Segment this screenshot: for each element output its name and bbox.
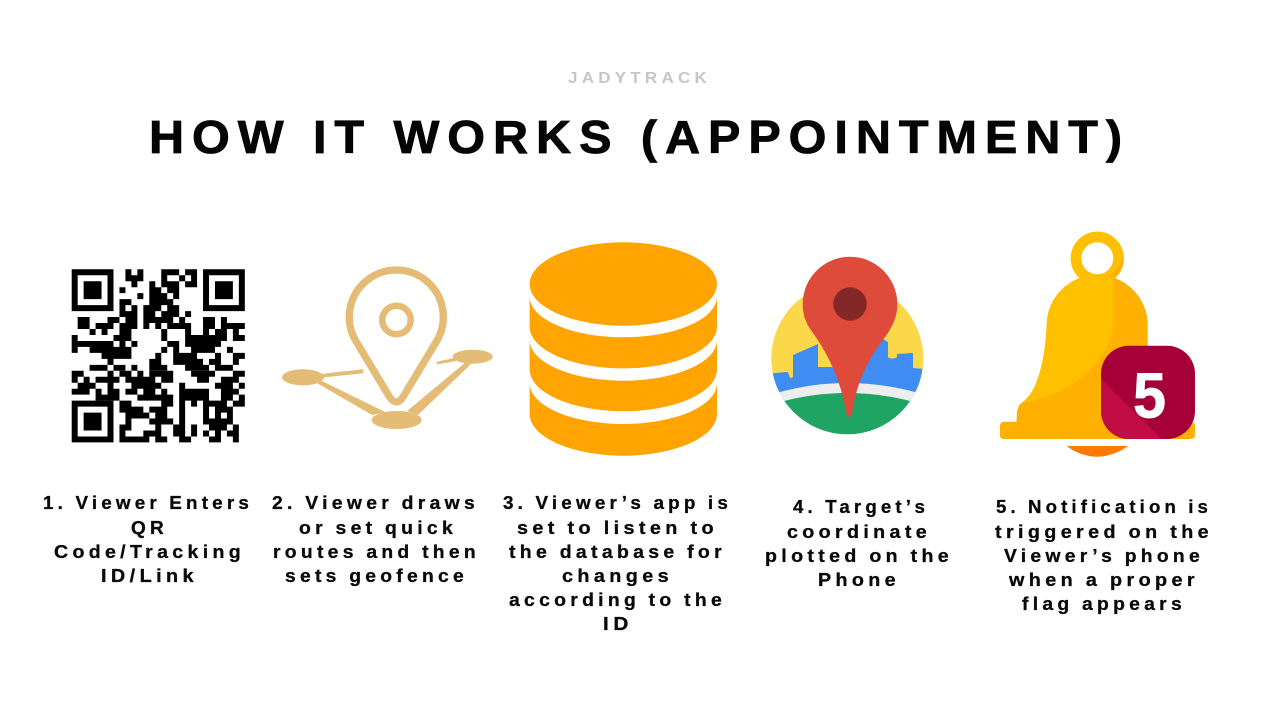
step 5 caption bbox=[995, 497, 1213, 614]
step 5 caption: Viewer’s phone bbox=[1004, 546, 1204, 566]
step 5 caption: when a proper bbox=[1008, 570, 1199, 590]
step 2 caption: or set quick bbox=[299, 518, 457, 538]
icon: notification bell with badge: 5 bbox=[1133, 360, 1166, 432]
step 2 caption: sets geofence bbox=[285, 566, 468, 586]
step 5 caption: triggered on the bbox=[995, 522, 1213, 542]
step 2 caption: routes and then bbox=[273, 542, 480, 562]
step 3 caption: 3. Viewer’s app is bbox=[503, 493, 732, 513]
step 4 caption bbox=[765, 497, 953, 590]
step 1 caption bbox=[43, 493, 253, 586]
step 1 caption: 1. Viewer Enters bbox=[43, 493, 253, 513]
step 3 caption: according to the bbox=[509, 590, 726, 610]
step 4 caption: plotted on the bbox=[765, 546, 953, 566]
step 1 caption: Code/Tracking bbox=[54, 542, 245, 562]
step 5 caption: flag appears bbox=[1022, 594, 1186, 614]
step 3 caption: changes bbox=[562, 566, 673, 586]
step 2 caption bbox=[272, 493, 480, 586]
step 1 caption: QR bbox=[131, 518, 168, 538]
step 5 caption: 5. Notification is bbox=[996, 497, 1212, 517]
step 4 caption: 4. Target’s bbox=[793, 497, 929, 517]
title: HOW IT WORKS (APPOINTMENT) bbox=[149, 111, 1130, 163]
step 3 caption bbox=[503, 493, 732, 634]
icon: map pin with route points bbox=[282, 270, 493, 429]
step 3 caption: the database for bbox=[509, 542, 726, 562]
step 1 caption: ID/Link bbox=[101, 566, 198, 586]
icon: map with location pin bbox=[770, 257, 925, 440]
step 3 caption: set to listen to bbox=[517, 518, 718, 538]
icon: database stack bbox=[530, 242, 717, 456]
icon: QR code bbox=[72, 269, 245, 442]
eyebrow: brand name: JADYTRACK bbox=[568, 70, 711, 87]
icon: notification bell with badge bbox=[1000, 237, 1195, 457]
step 4 caption: Phone bbox=[818, 570, 900, 590]
step 2 caption: 2. Viewer draws bbox=[272, 493, 479, 513]
step 4 caption: coordinate bbox=[787, 522, 931, 542]
step 3 caption: ID bbox=[603, 614, 633, 634]
